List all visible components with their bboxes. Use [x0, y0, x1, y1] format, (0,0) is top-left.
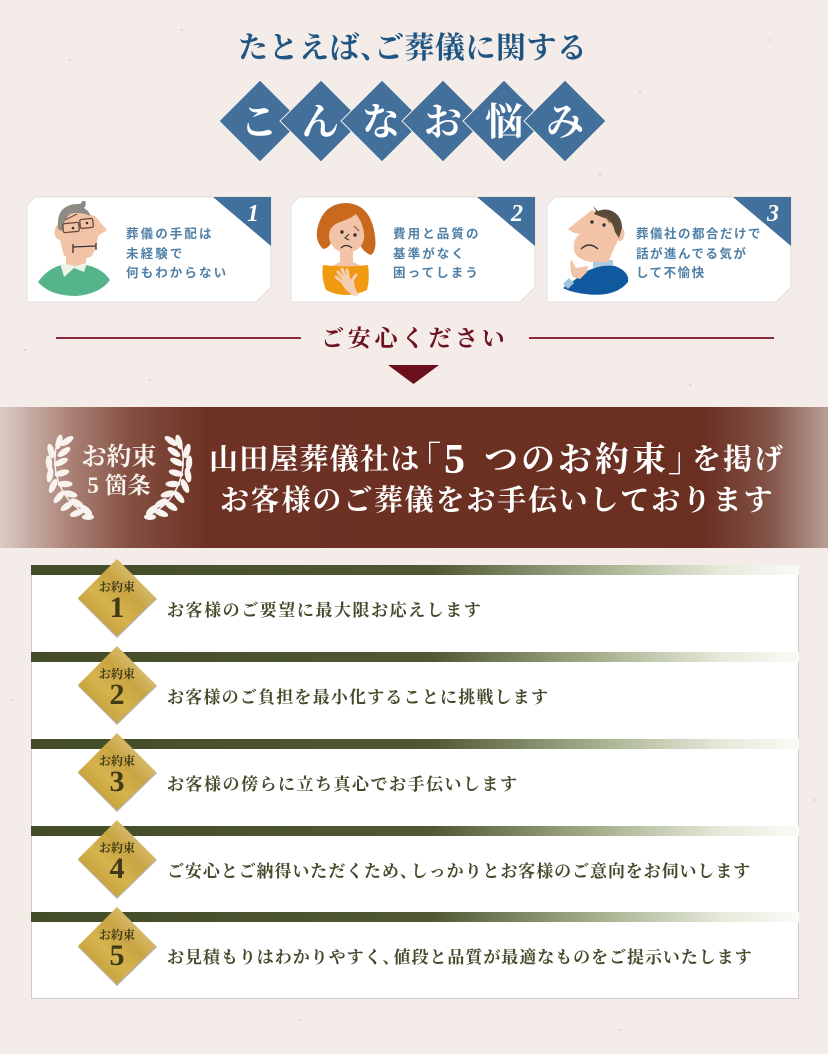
text: worry 2: 費用と品質の — [393, 227, 481, 241]
badge 1 — [78, 559, 157, 638]
heading: diamond row: な — [362, 102, 400, 144]
badge 4: 4 — [110, 852, 124, 885]
badge 3 — [78, 733, 157, 812]
banner message line 1: 5 — [444, 437, 465, 483]
text: worry 1: 葬儀の手配は — [126, 227, 214, 241]
promise bar 5 — [31, 912, 799, 922]
banner message line 2: お客様のご葬儀をお手伝いしております — [220, 485, 774, 517]
text: worry 1 — [126, 227, 228, 280]
panel: worry 2: 2 — [510, 201, 523, 227]
panel: worry 1 — [26, 196, 272, 302]
badge 4 — [78, 820, 157, 899]
text: worry 2: 基準がなく — [393, 246, 466, 260]
panel: promise banner — [0, 407, 828, 548]
divider right line — [529, 337, 774, 339]
badge 5 — [78, 907, 157, 986]
badge 2: 2 — [110, 678, 124, 711]
left branch — [45, 434, 94, 520]
banner message line 1 — [209, 437, 785, 483]
title: 、 — [360, 32, 390, 65]
promise text 5: お見積もりはわかりやすく 値段と品質が最適なものをご提示いたします — [167, 948, 753, 967]
heading: diamond row: 悩 — [485, 102, 523, 144]
panel: worry 3: 3 — [766, 201, 779, 227]
badge 2: お約束 — [99, 666, 135, 681]
text: worry 3: して不愉快 — [636, 266, 706, 280]
promise text 5: 、 — [383, 948, 400, 967]
badge 5: お約束 — [99, 927, 135, 942]
text: worry 2: 困ってしまう — [393, 266, 480, 280]
gold diamond badges — [78, 559, 157, 986]
promise bar 3 — [31, 739, 799, 748]
title: たとえば ご葬儀に関する — [238, 32, 588, 65]
reassurance heading: ご安心ください — [321, 326, 509, 351]
panel: worry 1: 1 — [247, 201, 259, 227]
badge 3: お約束 — [99, 753, 135, 768]
banner message line 1: 「 — [407, 442, 441, 479]
badge text: お約束 — [81, 444, 156, 471]
text: worry 3 — [636, 227, 762, 280]
panel: worry 2 — [290, 196, 536, 302]
badge text: 5 箇条 — [87, 473, 151, 498]
banner message line 1: 」 — [668, 442, 702, 479]
promise bar 1 — [31, 565, 799, 574]
badge 3: 3 — [110, 765, 124, 798]
right branch — [144, 434, 193, 520]
icon: laurel wreath — [46, 434, 192, 520]
heading: diamond row: お — [424, 102, 462, 144]
heading: diamond row: こ — [240, 102, 278, 144]
heading: diamond row: み — [546, 102, 584, 144]
text: worry 2 — [393, 227, 481, 280]
promise text 1: お客様のご要望に最大限お応えします — [167, 601, 482, 620]
promise bar 4 — [31, 826, 799, 836]
text: worry 3: 葬儀社の都合だけで — [636, 227, 762, 241]
badge text — [81, 444, 156, 498]
badge 4: お約束 — [99, 840, 135, 855]
heading: diamond row — [220, 80, 606, 162]
badge 2 — [78, 646, 157, 725]
badge 1: 1 — [110, 591, 124, 624]
panel: worry 3 — [546, 196, 792, 302]
badge 5: 5 — [110, 939, 124, 972]
promise text 3: お客様の傍らに立ち真心でお手伝いします — [167, 775, 518, 794]
promise bar 2 — [31, 652, 799, 662]
badge 1: お約束 — [99, 579, 135, 594]
panel: promises list — [31, 565, 799, 999]
promise text 4: ご安心とご納得いただくため しっかりとお客様のご意向をお伺いします — [167, 862, 751, 881]
banner message line 1: 山田屋葬儀社は — [209, 444, 420, 476]
arrow — [388, 365, 439, 384]
text: worry 3: 話が進んでる気が — [636, 246, 747, 260]
promise text 2: お客様のご負担を最小化することに挑戦します — [167, 688, 549, 707]
banner message line 1: を掲げ — [692, 444, 785, 476]
divider left line — [56, 337, 301, 339]
banner message line 1: つのお約束 — [484, 442, 669, 479]
text: worry 1: 何もわからない — [126, 266, 228, 280]
heading: diamond row: ん — [301, 102, 339, 144]
promise text 4: 、 — [400, 862, 418, 881]
text: worry 1: 未経験で — [126, 246, 184, 260]
